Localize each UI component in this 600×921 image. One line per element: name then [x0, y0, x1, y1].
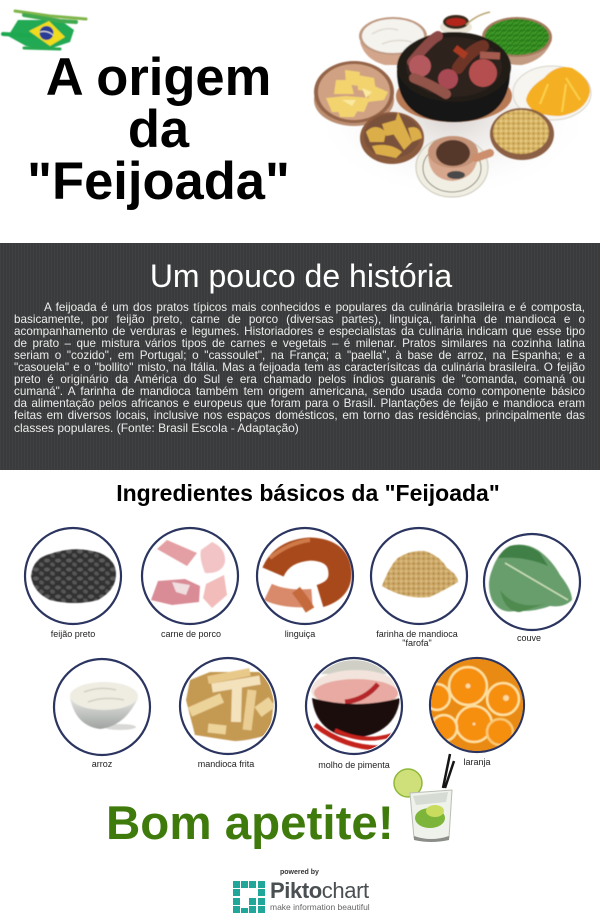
rice bowl: [359, 17, 427, 65]
ingredient: farinha de mandioca: [371, 528, 467, 648]
ingredient: couve: [484, 534, 580, 643]
piktochart wordmark: Piktochart: [270, 878, 369, 903]
title: [27, 48, 290, 211]
icon: brazilian flag brush strokes: [0, 8, 88, 52]
cup on saucer: [416, 136, 490, 197]
closing text: bom apetite: Bom apetite!: [106, 797, 394, 850]
ingredient: laranja: laranja: [463, 757, 491, 767]
farofa bowl: [490, 108, 554, 160]
heading: ingredientes: Ingredientes básicos da "Feijoada": [116, 480, 500, 506]
history paragraph: da alimentação pelos africanos e europeus que foram para o Brasil. Plantações de feijão e mandioca eram: [14, 397, 585, 410]
ingredient: farinha de mandioca: "farofa": [402, 638, 432, 648]
history paragraph: de prato – que mistura vários tipos de carnes e vegetais – é milenar. Pratos similares na cozinha latina: [14, 337, 585, 350]
icon: caipirinha glass: [393, 754, 456, 842]
ingredient: feijao preto: feijão preto: [51, 629, 95, 639]
history paragraph: classes populares. (Fonte: Brasil Escola - Adaptação): [14, 421, 299, 435]
ingredient: mandioca frita: [180, 658, 276, 769]
ingredient: couve: couve: [517, 633, 541, 643]
panel heading: Um pouco de história: [150, 258, 452, 294]
history paragraph: A feijoada é um dos pratos típicos mais conhecidos e populares da culinária brasileira e é composta,: [44, 301, 585, 314]
piktochart icon: [233, 881, 265, 913]
clay plate under pot: [396, 70, 512, 122]
ingredient: arroz: arroz: [92, 759, 113, 769]
ingredient: mandioca frita: mandioca frita: [198, 759, 254, 769]
greens bowl: [482, 17, 552, 65]
history paragraph: [14, 301, 585, 435]
torresmo bowl: [360, 112, 424, 164]
history paragraph: basicamente, por feijão preto, carne de porco (diversas partes), linguiça, farinha de mandioca e o: [14, 313, 585, 326]
illustration: feijoada table spread: [313, 10, 592, 198]
ingredient: carne de porco: carne de porco: [161, 629, 221, 639]
title: A origem: [46, 48, 271, 107]
history paragraph: "casouela" e o "bollito" misto, na Itália. Mas a feijoada tem as caracterísitcas da culinária brasileira. O feijão: [14, 361, 585, 374]
history paragraph: cumaná". A farinha de mandioca também tem origem americana, sendo usada como componente básico: [14, 385, 585, 398]
ingredient: carne de porco: [142, 528, 238, 639]
history paragraph: acompanhamento de verduras e legumes. Historiadores e especialistas da culinária indicam que esse tipo: [14, 325, 585, 338]
logo: piktochart footer: [233, 868, 370, 913]
history paragraph: seriam o "cozido", em Portugal; o "cassoulet", na França; a "paella", à base de arroz, na Espanha; e a: [14, 349, 585, 362]
pepper sauce bowl: [440, 12, 490, 35]
orange plate: [513, 66, 591, 120]
black clay pot with meats: [397, 32, 511, 122]
ingredient: molho de pimenta: molho de pimenta: [318, 760, 390, 770]
history paragraph: feitas em diversos locais, inclusive nos espaços domésticos, em torno das residências, principalmente das: [14, 409, 585, 422]
title: da: [128, 100, 189, 159]
mandioca bowl: [314, 61, 394, 126]
panel: um pouco de historia: [0, 243, 600, 470]
ingredient: molho de pimenta: [306, 658, 402, 770]
ingredient: farinha de mandioca: farinha de mandioca: [376, 629, 458, 639]
ingredient: feijao preto: [25, 528, 121, 639]
ingredient: linguica: linguiça: [285, 629, 315, 639]
ingredient: arroz: [54, 659, 150, 769]
ingredient: linguica: [257, 528, 353, 639]
powered by label: powered by: [280, 869, 319, 876]
tagline: make information beautiful: [270, 902, 370, 912]
history paragraph: preto é originário da América do Sul e era chamado pelos índios guaranis de "comanda, comaná ou: [14, 373, 585, 386]
title: "Feijoada": [27, 152, 290, 211]
ingredient: laranja: [424, 655, 530, 767]
ingredient grid: [24, 526, 582, 770]
